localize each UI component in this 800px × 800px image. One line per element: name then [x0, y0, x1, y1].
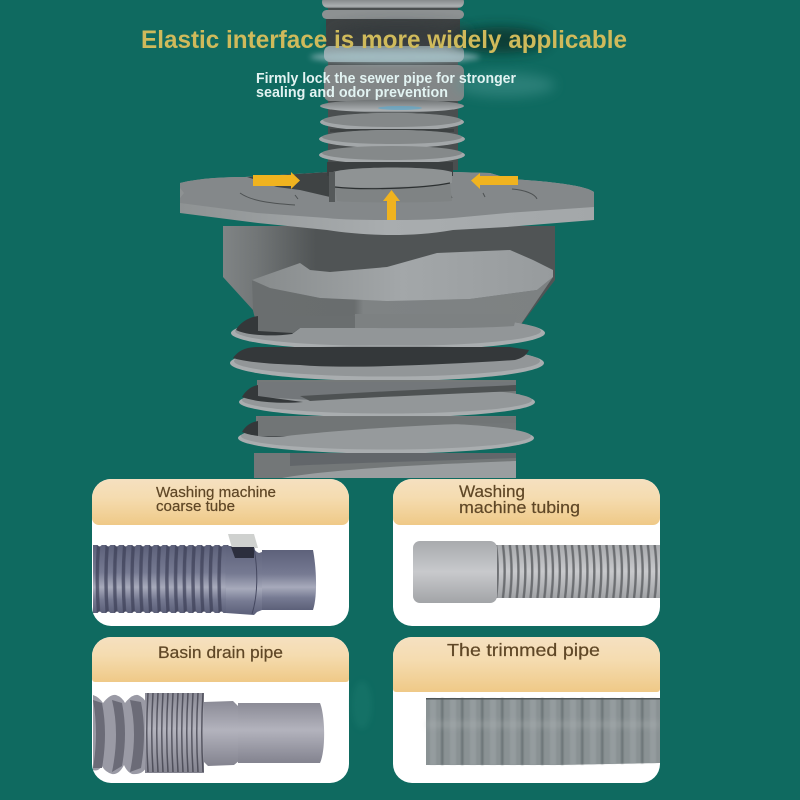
cylinder section 3 — [256, 416, 516, 438]
pipe image — [426, 698, 660, 765]
ring 3 — [239, 382, 535, 418]
title: Elastic interface is more widely applicable — [141, 26, 627, 54]
panel: basin drain pipe — [92, 628, 349, 783]
base cylinder — [254, 453, 516, 478]
base flange with neck — [180, 162, 594, 235]
label: Washing — [459, 482, 525, 501]
panel header — [92, 479, 349, 525]
tube image — [93, 534, 316, 615]
ring 1 — [231, 314, 545, 350]
yellow arrows — [253, 172, 518, 220]
subtitle text: Firmly lock the sewer pipe for stronger — [256, 71, 516, 87]
tube image — [413, 541, 660, 603]
panel header — [92, 637, 349, 682]
cylinder section 1 — [257, 349, 515, 371]
flexible body rings — [230, 314, 545, 478]
panel: washing machine tubing — [393, 470, 660, 626]
faint retouch patch — [352, 681, 372, 729]
label: Washing machine — [156, 484, 276, 501]
subtitle text: sealing and odor prevention — [256, 85, 448, 101]
main drain body — [223, 226, 555, 330]
bellows ring 1 — [320, 113, 464, 131]
bellows ring 3 — [319, 146, 465, 164]
label: coarse tube — [156, 498, 235, 515]
arrow: up pointing — [383, 190, 400, 220]
pipe image — [93, 693, 324, 774]
label: machine tubing — [459, 498, 580, 517]
upper corrugated pipe — [319, 0, 465, 170]
cylinder section 2 — [257, 380, 516, 398]
arrow: right pointing — [253, 172, 300, 189]
ring 4 — [238, 417, 534, 454]
label: Basin drain pipe — [158, 644, 283, 662]
smudged retouch over pipe — [310, 24, 555, 110]
label: The trimmed pipe — [447, 640, 600, 660]
panel: washing machine coarse tube — [92, 470, 349, 626]
panel header — [393, 637, 660, 692]
panel header — [393, 479, 660, 525]
arrow: left pointing — [471, 173, 518, 189]
ring 2 — [230, 345, 544, 381]
panel: the trimmed pipe — [393, 628, 660, 783]
label — [459, 482, 580, 517]
infographic canvas — [92, 0, 660, 783]
bellows ring 2 — [319, 130, 465, 148]
subtitle text — [256, 71, 516, 101]
label — [156, 484, 276, 515]
